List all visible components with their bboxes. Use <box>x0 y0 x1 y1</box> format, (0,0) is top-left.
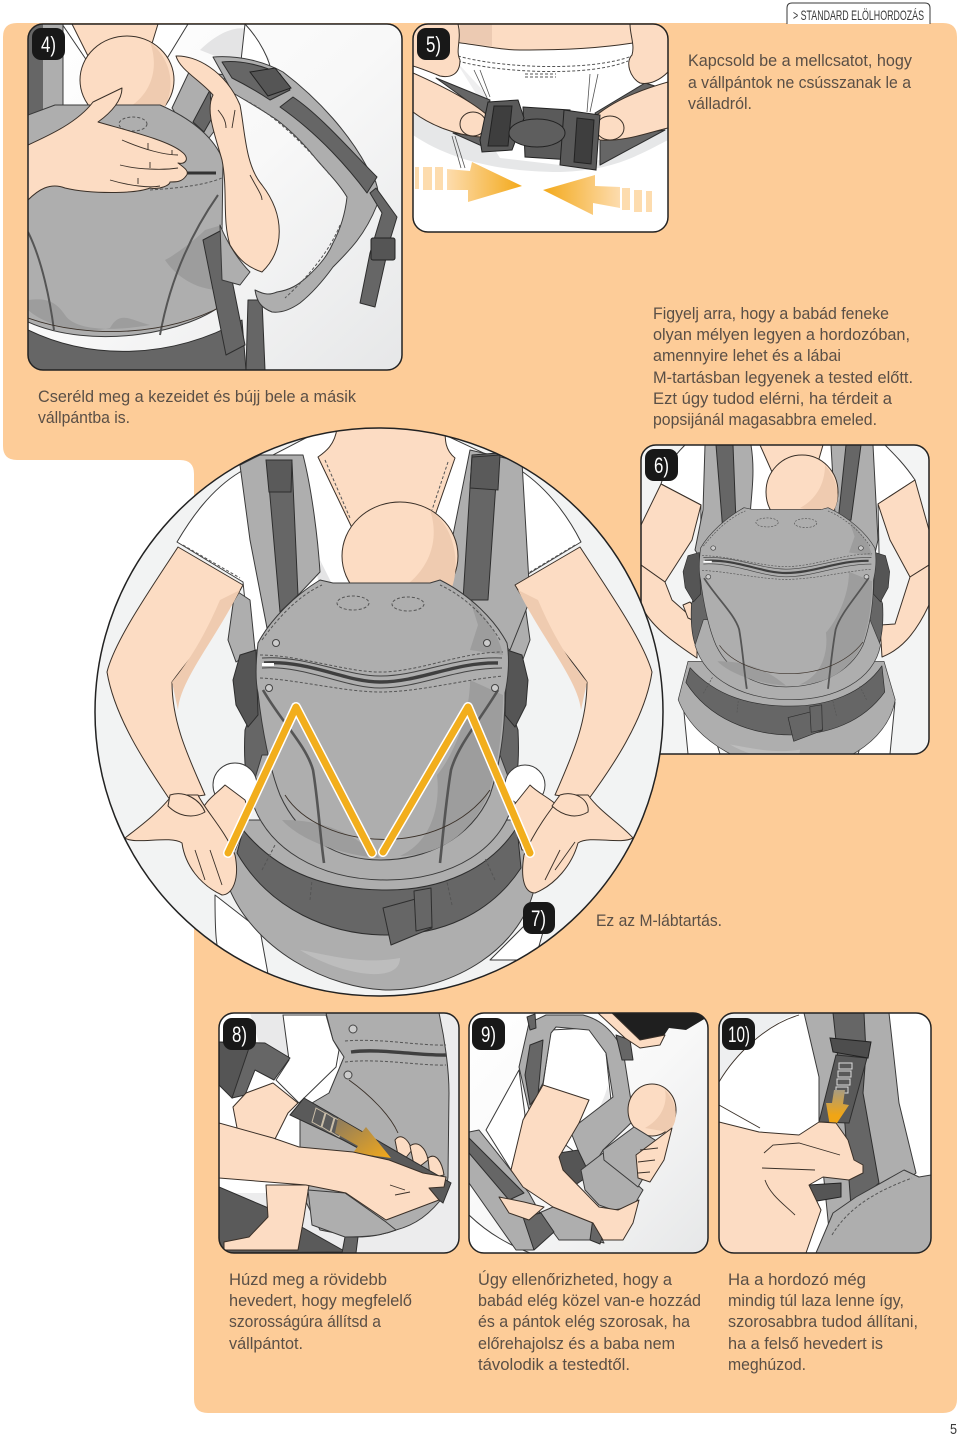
text: step 10: mindig túl laza lenne így, <box>728 1291 904 1310</box>
text: step 10 <box>728 1270 918 1374</box>
text: step 8 <box>229 1270 412 1353</box>
text: step 10: Ha a hordozó még <box>728 1270 866 1289</box>
text: step 4: Cseréld meg a kezeidet és bújj bele a másik <box>38 387 356 406</box>
text: step 8: vállpántot. <box>229 1334 303 1353</box>
panel: step 4 illustration <box>28 24 402 370</box>
text: step 6 <box>653 304 913 429</box>
text: step 10: szorosabbra tudod állítani, <box>728 1312 918 1331</box>
panel: step 8 illustration <box>219 1013 459 1253</box>
panel: step 7 circular illustration <box>95 428 663 996</box>
badge 8: 8) <box>232 1022 247 1047</box>
text: step 4: vállpántba is. <box>38 408 130 427</box>
badge 4 <box>32 28 65 60</box>
text: step 8: hevedert, hogy megfelelő <box>229 1291 412 1310</box>
text: step 9: és a pántok elég szorosak, ha <box>478 1312 691 1331</box>
text: step 5 <box>688 51 912 113</box>
panel: step 5 illustration <box>413 24 668 232</box>
badge 10 <box>722 1018 755 1050</box>
text: step 6: M-tartásban legyenek a tested előtt. <box>653 368 913 387</box>
text: step 10: meghúzod. <box>728 1355 806 1374</box>
badge 5 <box>417 28 450 60</box>
badge 9: 9) <box>481 1022 496 1047</box>
text: step 5: Kapcsold be a mellcsatot, hogy <box>688 51 912 70</box>
badge 10: 10) <box>728 1022 750 1047</box>
text: step 4 <box>38 387 356 427</box>
badge 6: 6) <box>654 453 669 478</box>
text: step 6: popsijánál magasabbra emeled. <box>653 410 877 429</box>
badge 7 <box>523 902 555 934</box>
text: step 9: Úgy ellenőrizheted, hogy a <box>478 1270 673 1289</box>
text: step 6: amennyire lehet és a lábai <box>653 346 841 365</box>
text: step 9: előrehajolsz és a baba nem <box>478 1334 675 1353</box>
text: step 9: babád elég közel van-e hozzád <box>478 1291 701 1310</box>
text: step 8: szorosságúra állítsd a <box>229 1312 381 1331</box>
text: step 6: Ezt úgy tudod elérni, ha térdeit a <box>653 389 893 408</box>
text: step 8: Húzd meg a rövidebb <box>229 1270 387 1289</box>
text: step 6: olyan mélyen legyen a hordozóban, <box>653 325 910 344</box>
text: step 9 <box>478 1270 701 1374</box>
badge 4: 4) <box>41 32 56 57</box>
section tab <box>787 3 930 24</box>
panel: step 6 illustration <box>641 445 929 770</box>
badge 5: 5) <box>426 32 441 57</box>
text: step 9: távolodik a testedtől. <box>478 1355 630 1374</box>
text: step 5: válladról. <box>688 94 752 113</box>
panel: step 9 illustration <box>469 1013 708 1253</box>
panel: step 10 illustration <box>719 1013 931 1253</box>
badge 6 <box>645 449 678 481</box>
badge 9 <box>472 1018 505 1050</box>
text: step 7: Ez az M-lábtartás. <box>596 911 722 930</box>
badge 8 <box>223 1018 256 1050</box>
text: step 10: ha a felső hevedert is <box>728 1334 883 1353</box>
text: step 5: a vállpántok ne csússzanak le a <box>688 73 911 92</box>
text: step 6: Figyelj arra, hogy a babád feneke <box>653 304 889 323</box>
badge 7: 7) <box>531 906 546 931</box>
